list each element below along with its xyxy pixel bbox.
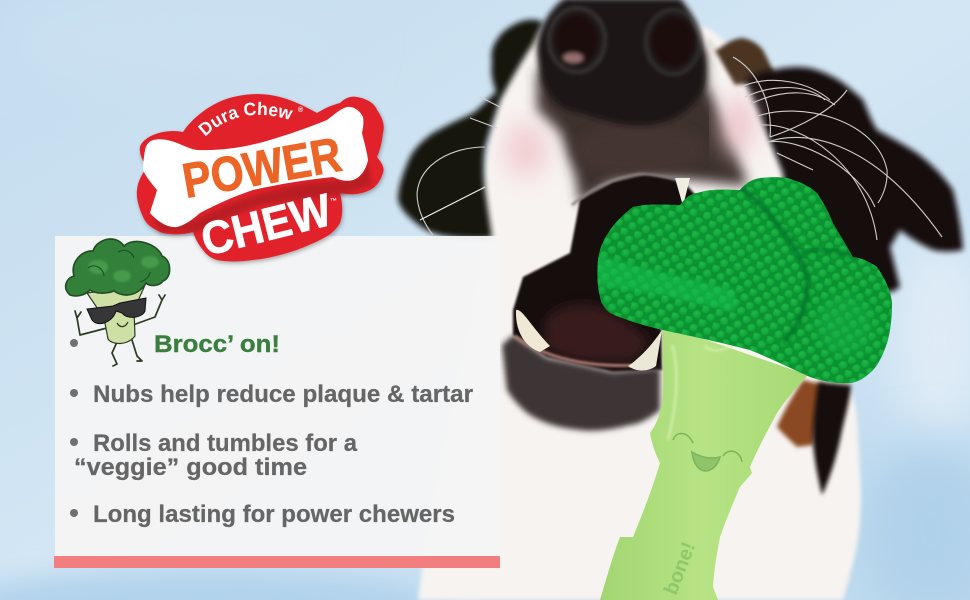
- dog mouth interior: [513, 174, 700, 372]
- dog muzzle dark: [537, 50, 748, 205]
- bullet: Brocc' on: [70, 331, 280, 358]
- panel: features: [54, 236, 500, 568]
- dog muzzle core: [575, 124, 705, 176]
- panel accent bar: [54, 556, 500, 568]
- bullet: nubs: Nubs help reduce plaque & tartar: [93, 381, 473, 408]
- dog teeth: [675, 178, 690, 206]
- bullet: Brocc' on: Brocc’ on!: [154, 331, 280, 358]
- mascot sunglasses: [87, 298, 146, 324]
- dog nostrils: [549, 8, 700, 74]
- logo: Dura Chew Power Chew: [136, 94, 387, 266]
- logo text: Dura Chew: Dura Chew: [198, 102, 293, 136]
- photo: dog biting broccoli toy: [398, 0, 963, 600]
- toy face: [673, 434, 742, 471]
- bullet: rolls and tumbles: Rolls and tumbles for a: [93, 430, 358, 457]
- dog black tuft: [813, 382, 851, 495]
- mascot arms and legs: [75, 295, 165, 366]
- dog pink muzzle marks: [504, 122, 548, 178]
- logo red badge: [137, 94, 384, 262]
- toy broccoli head: [597, 177, 892, 384]
- toy bone text: bone!: [660, 539, 700, 598]
- logo text: POWER: POWER: [179, 128, 345, 209]
- toy stem: [600, 325, 808, 600]
- mascot florets: [66, 239, 170, 296]
- dog tan patch: [777, 380, 825, 447]
- dog left black ear: [398, 20, 543, 238]
- logo bone shadow: [150, 162, 372, 232]
- dog right black fur: [745, 67, 963, 292]
- bullet: long lasting: Long lasting for power chewers: [93, 501, 455, 528]
- dog right ear tan top: [708, 38, 775, 85]
- dog lower lip: [502, 335, 660, 431]
- logo registered mark: ®: [298, 106, 304, 114]
- dog whiskers: [417, 57, 942, 240]
- icon: broccoli mascot with sunglasses: [66, 239, 170, 366]
- bullet: rolls and tumbles: [70, 430, 358, 481]
- dog gum line: [515, 336, 655, 366]
- logo white bone: [143, 107, 368, 227]
- dog nose: [537, 0, 706, 126]
- mascot stalk: [87, 285, 145, 344]
- logo text: CHEW: CHEW: [196, 183, 337, 266]
- dog upper lip line: [572, 174, 685, 205]
- logo trademark: ™: [330, 198, 337, 205]
- toy highlights: [668, 340, 740, 440]
- bullet: rolls and tumbles: “veggie” good time: [74, 454, 307, 481]
- dog white fur body: [418, 25, 861, 600]
